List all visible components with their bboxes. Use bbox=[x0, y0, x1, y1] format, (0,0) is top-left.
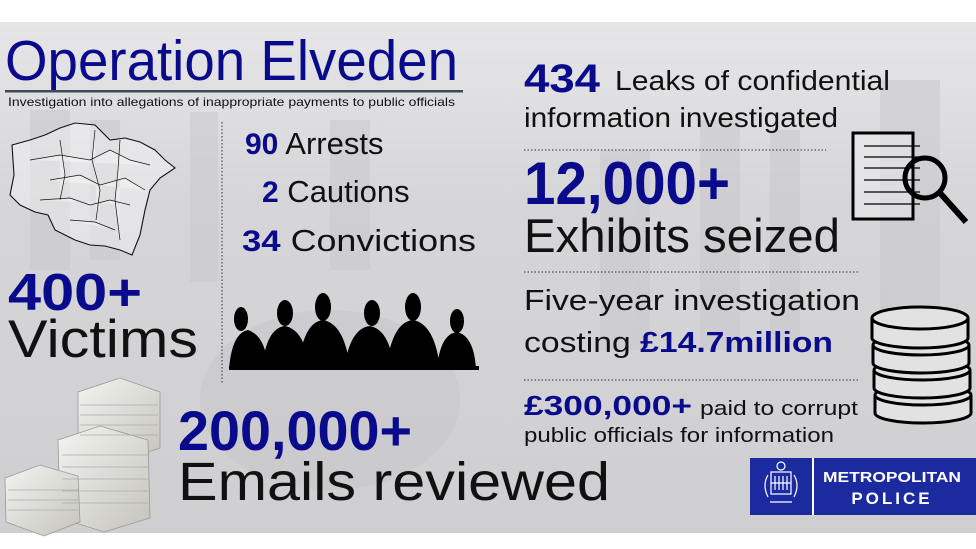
icon: coin stack bbox=[872, 307, 971, 423]
stat: five-year cost: Five-year investigation bbox=[524, 285, 860, 317]
stat: emails: 200,000+ bbox=[178, 399, 412, 462]
stat: arrests/cautions/convictions: 34 Convictions bbox=[242, 223, 476, 258]
stat: victims bbox=[8, 264, 198, 369]
stat: exhibits: 12,000+ bbox=[524, 150, 730, 217]
stat: five-year cost: costing £14.7million bbox=[524, 327, 833, 359]
stat: payments bbox=[524, 390, 859, 447]
icon: document with magnifier bbox=[853, 133, 966, 222]
stat: victims: Victims bbox=[8, 310, 198, 369]
stat: leaks: 434 bbox=[524, 57, 601, 101]
stat: payments: £300,000+ bbox=[524, 390, 692, 421]
logo: Metropolitan Police bbox=[750, 458, 976, 515]
stat: victims: 400+ bbox=[8, 264, 142, 322]
stat: leaks: Leaks of confidential bbox=[615, 65, 890, 96]
logo: Metropolitan Police: POLICE bbox=[851, 489, 933, 508]
stat: exhibits bbox=[524, 150, 840, 262]
stat: arrests/cautions/convictions: 90 Arrests bbox=[245, 126, 383, 161]
stat: arrests/cautions/convictions: 2 Cautions bbox=[262, 174, 410, 209]
stat: five-year cost bbox=[524, 285, 860, 359]
icon: paper stacks bbox=[5, 378, 160, 536]
stat: payments: paid to corrupt bbox=[700, 398, 859, 420]
stat: exhibits: Exhibits seized bbox=[524, 209, 840, 262]
logo: Metropolitan Police: METROPOLITAN bbox=[823, 469, 961, 486]
stat: emails bbox=[178, 399, 610, 512]
stat: leaks: information investigated bbox=[524, 102, 838, 133]
subtitle: Investigation into allegations of inappropriate payments to public officials bbox=[8, 95, 455, 109]
stat: leaks bbox=[524, 57, 890, 133]
divider: dotted vertical bbox=[221, 122, 223, 383]
icon: London boroughs map bbox=[10, 123, 175, 255]
stat: arrests/cautions/convictions bbox=[242, 126, 476, 258]
stat: emails: Emails reviewed bbox=[178, 452, 610, 512]
stat: payments: public officials for information bbox=[524, 425, 834, 447]
icon: people silhouettes bbox=[229, 293, 479, 370]
title: Operation Elveden bbox=[5, 29, 458, 93]
